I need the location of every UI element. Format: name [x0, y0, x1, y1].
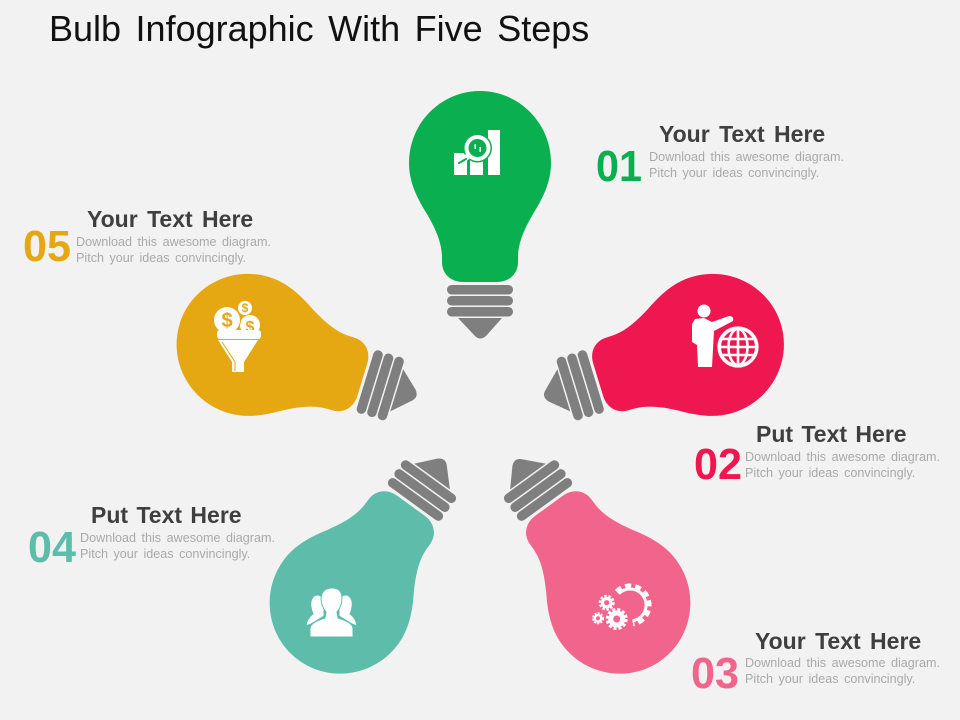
- title: Bulb Infographic With Five Steps: [49, 8, 589, 49]
- label 02: Pitch your ideas convincingly.: [745, 466, 915, 480]
- bulb 01: green: [409, 91, 551, 338]
- label 05: Your Text Here: [87, 206, 253, 232]
- label 04: 04: [28, 523, 77, 572]
- icon: funnel with coins: $: [221, 310, 233, 332]
- label 02: Download this awesome diagram.: [745, 450, 940, 464]
- label 01: Download this awesome diagram.: [649, 150, 844, 164]
- label 01: Pitch your ideas convincingly.: [649, 166, 819, 180]
- label 03: Download this awesome diagram.: [745, 656, 940, 670]
- label 01: [596, 121, 844, 191]
- label 05: 05: [23, 222, 71, 271]
- label 02: 02: [694, 440, 742, 489]
- label 05: Download this awesome diagram.: [76, 235, 271, 249]
- label 02: [694, 421, 940, 489]
- label 01: Your Text Here: [659, 121, 825, 147]
- label 04: Pitch your ideas convincingly.: [80, 547, 250, 561]
- bulb 04: teal: [241, 418, 502, 702]
- label 03: [691, 628, 940, 698]
- label 03: Your Text Here: [755, 628, 921, 654]
- icon: gears: [593, 586, 649, 628]
- label 03: 03: [691, 649, 739, 698]
- icon: bar chart with magnifier: [454, 130, 500, 175]
- icon: funnel with coins: $: [242, 301, 249, 315]
- label 04: Download this awesome diagram.: [80, 531, 275, 545]
- bulb 02: red: [523, 256, 802, 464]
- bulb 03: pink: [458, 418, 719, 702]
- label 05: Pitch your ideas convincingly.: [76, 251, 246, 265]
- icon: funnel with coins: [213, 301, 261, 372]
- icon: group of people: [306, 588, 357, 637]
- label 05: [23, 206, 271, 271]
- icon: presenter with globe: [692, 304, 760, 369]
- label 02: Put Text Here: [756, 421, 907, 447]
- label 01: 01: [596, 142, 642, 191]
- label 04: Put Text Here: [91, 502, 242, 528]
- icon: funnel with coins: $: [246, 319, 255, 336]
- label 04: [28, 502, 275, 572]
- label 03: Pitch your ideas convincingly.: [745, 672, 915, 686]
- bulb 05: yellow: [159, 256, 437, 464]
